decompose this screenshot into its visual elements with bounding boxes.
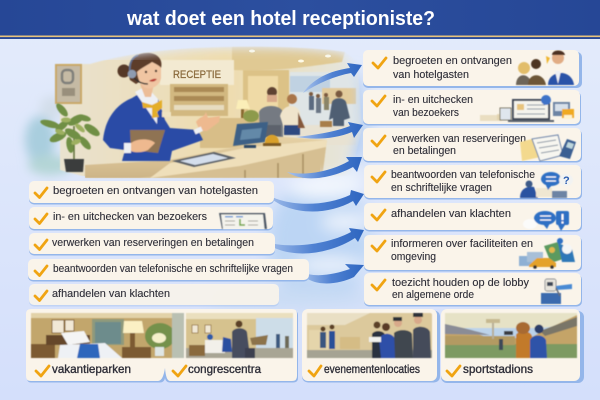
label: sportstadions: sportstadions [463,362,533,376]
icon: laptop and printer [480,95,574,122]
ceiling [232,47,345,70]
open hand [196,112,220,131]
image: stadium [445,313,577,358]
shirt collar [135,86,158,124]
icon: guests and host [516,50,574,85]
neck scarf [142,100,162,118]
left card 5 [29,284,279,306]
distant people [309,92,329,113]
back desk and flowers [200,118,260,148]
lobby back wall [60,47,362,178]
left card 2 [29,207,273,230]
left card 4 [28,259,309,282]
card: sportstadions [441,309,584,383]
illustration: hotel reception with receptionist [39,47,362,178]
holding hand [130,139,155,152]
title: wat doet een hotel receptioniste? [126,8,435,30]
hair [128,53,161,84]
left card 2: in- en uitchecken van bezoekers [53,211,207,223]
right card 4: en schriftelijke vragen [391,182,492,194]
guest man [259,87,283,140]
image: holiday park room [31,313,184,358]
right card 3 [363,128,582,162]
arrow: list 4 to right cards [299,264,364,283]
lobby depth [243,70,356,145]
front desk [85,136,327,178]
left card 3: verwerken van reserveringen en betalingen [52,237,254,249]
icon: complaint speech bubbles [523,211,569,231]
icon: documents and calculator [520,135,576,161]
bell [263,135,281,146]
card: vakantieparken and congrescentra [26,309,298,382]
right card 1 [363,50,582,88]
lamp [236,100,250,120]
icon: map and car [519,238,575,269]
counter tablet [172,152,236,167]
icon: check-in screen [219,213,267,229]
title banner [0,0,600,39]
label: evenementenlocaties: evenementenlocaties [324,362,420,376]
arrow: hero to right list 1 [303,63,362,93]
panel: right task list [363,50,582,306]
arrow: list 1 to right cards [265,190,364,211]
background clouds [205,73,375,309]
right card 7: en algemene orde [392,289,474,301]
distant man [320,90,350,127]
right card 6: omgeving [391,251,436,263]
right card 2: in- en uitchecken [393,94,473,106]
right card 6: informeren over faciliteiten en [391,238,533,250]
left card 3 [29,233,275,256]
right card 3: verwerken van reserveringen [392,133,526,145]
left card 1: begroeten en ontvangen van hotelgasten [53,185,258,197]
panel: left task list [28,181,309,306]
blazer [103,92,203,161]
image: event staff [307,313,432,358]
label: vakantieparken: vakantieparken [52,362,131,376]
right card 3: en betalingen [393,145,456,157]
right card 2 [363,90,581,126]
arrow: list 3 to right cards [263,228,364,253]
right card 1: van hotelgasten [393,69,469,81]
arrow: hero to right list 3 [287,157,362,178]
bun [118,64,130,78]
receptionist [103,53,220,161]
left card 5: afhandelen van klachten [52,288,170,300]
icon: phone support [520,172,573,198]
guest woman [280,94,305,135]
right card 2: van bezoekers [393,107,459,119]
right card 4: beantwoorden van telefonische [391,169,535,181]
right card 4 [364,165,582,200]
reception sign: RECEPTIE [173,69,221,81]
right card 5: afhandelen van klachten [391,208,511,220]
arrow: hero to right list 2 [296,122,363,139]
label: congrescentra: congrescentra [188,362,261,376]
headset [130,55,138,72]
face [137,62,161,88]
left card 4: beantwoorden van telefonische en schriftelijke vragen [53,263,293,275]
card: evenementenlocaties [302,309,440,382]
monitor [233,122,268,148]
panel: locations [26,309,584,383]
key rack [170,84,228,116]
tablet [130,130,165,153]
neck [140,84,154,97]
right card 7 [364,273,582,306]
right card 1: begroeten en ontvangen [393,55,512,67]
right card 5 [364,203,582,232]
image: congress centre [186,313,293,358]
right card 6 [364,235,582,272]
plant [39,102,102,172]
left card 1 [29,181,274,204]
ceiling lights [249,50,331,62]
plaque on wall [55,64,82,104]
icon: question mark: ? [563,175,570,187]
name badge [162,112,171,117]
right card 7: toezicht houden op de lobby [392,277,529,289]
smile [149,79,157,82]
reception sign [160,60,234,85]
icon: security camera [541,279,572,304]
left foliage mist [25,96,72,175]
